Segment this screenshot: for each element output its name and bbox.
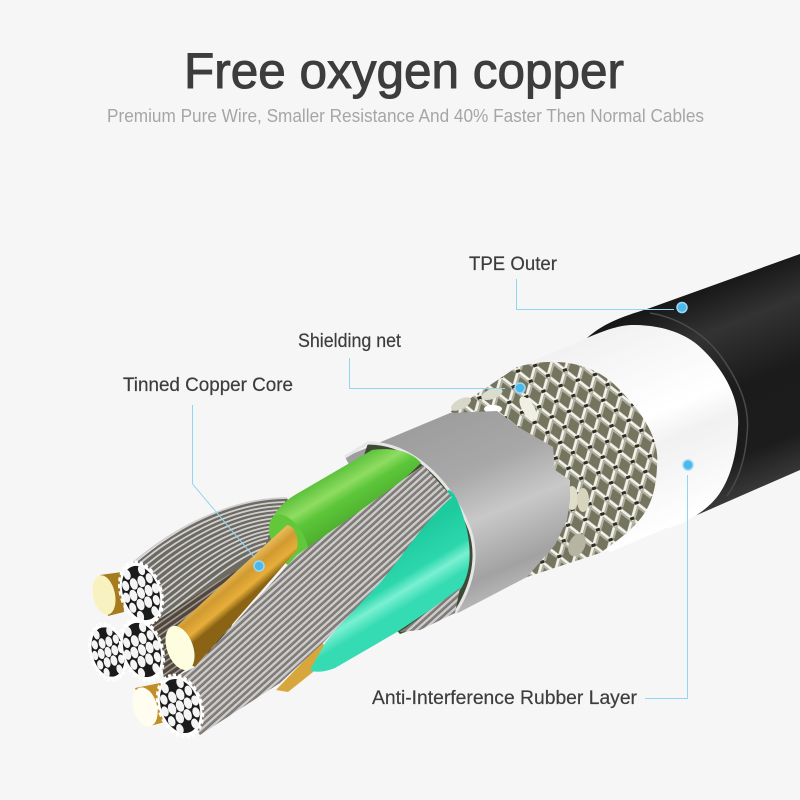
- strand end face top: [112, 556, 170, 630]
- copper tip bottom: [128, 682, 165, 729]
- shielding braid mesh: [449, 362, 657, 577]
- jacket rim: [650, 313, 748, 496]
- teal insulated wire: [310, 490, 470, 672]
- sleeve rim highlight: [345, 443, 474, 613]
- green insulated wire: [261, 449, 421, 576]
- bare copper conductor: [160, 525, 298, 674]
- lower strand bundle: [160, 465, 452, 735]
- callout: TPE Outer: TPE Outer: [469, 254, 558, 275]
- sleeve opening interior: [330, 443, 474, 634]
- inner lower strands: [400, 588, 460, 632]
- black TPE outer jacket: [587, 254, 800, 529]
- copper tip left: [89, 572, 124, 617]
- callout: Tinned Copper Core: [123, 375, 293, 571]
- callout: TPE Outer: [469, 254, 687, 312]
- strand end face middle: [113, 613, 171, 687]
- callout: Shielding net: Shielding net: [298, 331, 402, 352]
- title: Free oxygen copper: [184, 43, 624, 99]
- upper strand bundle: [122, 498, 305, 620]
- callout: Tinned Copper Core: Tinned Copper Core: [123, 375, 293, 396]
- white rubber layer: [503, 325, 738, 552]
- subtitle: Premium Pure Wire, Smaller Resistance And 40% Faster Then Normal Cables: [107, 106, 704, 126]
- callout: Anti-Interference Rubber Layer: [372, 460, 693, 709]
- hidden copper wire: [276, 642, 330, 692]
- strand end face left: [83, 619, 133, 685]
- callout: Anti-Interference Rubber Layer: Anti-Interference Rubber Layer: [372, 688, 638, 709]
- dark middle strands: [150, 560, 262, 685]
- callout: Shielding net: [298, 331, 525, 393]
- silver foil sleeve: [345, 411, 570, 613]
- strand end face front: [149, 669, 211, 743]
- cable illustration: [83, 254, 800, 743]
